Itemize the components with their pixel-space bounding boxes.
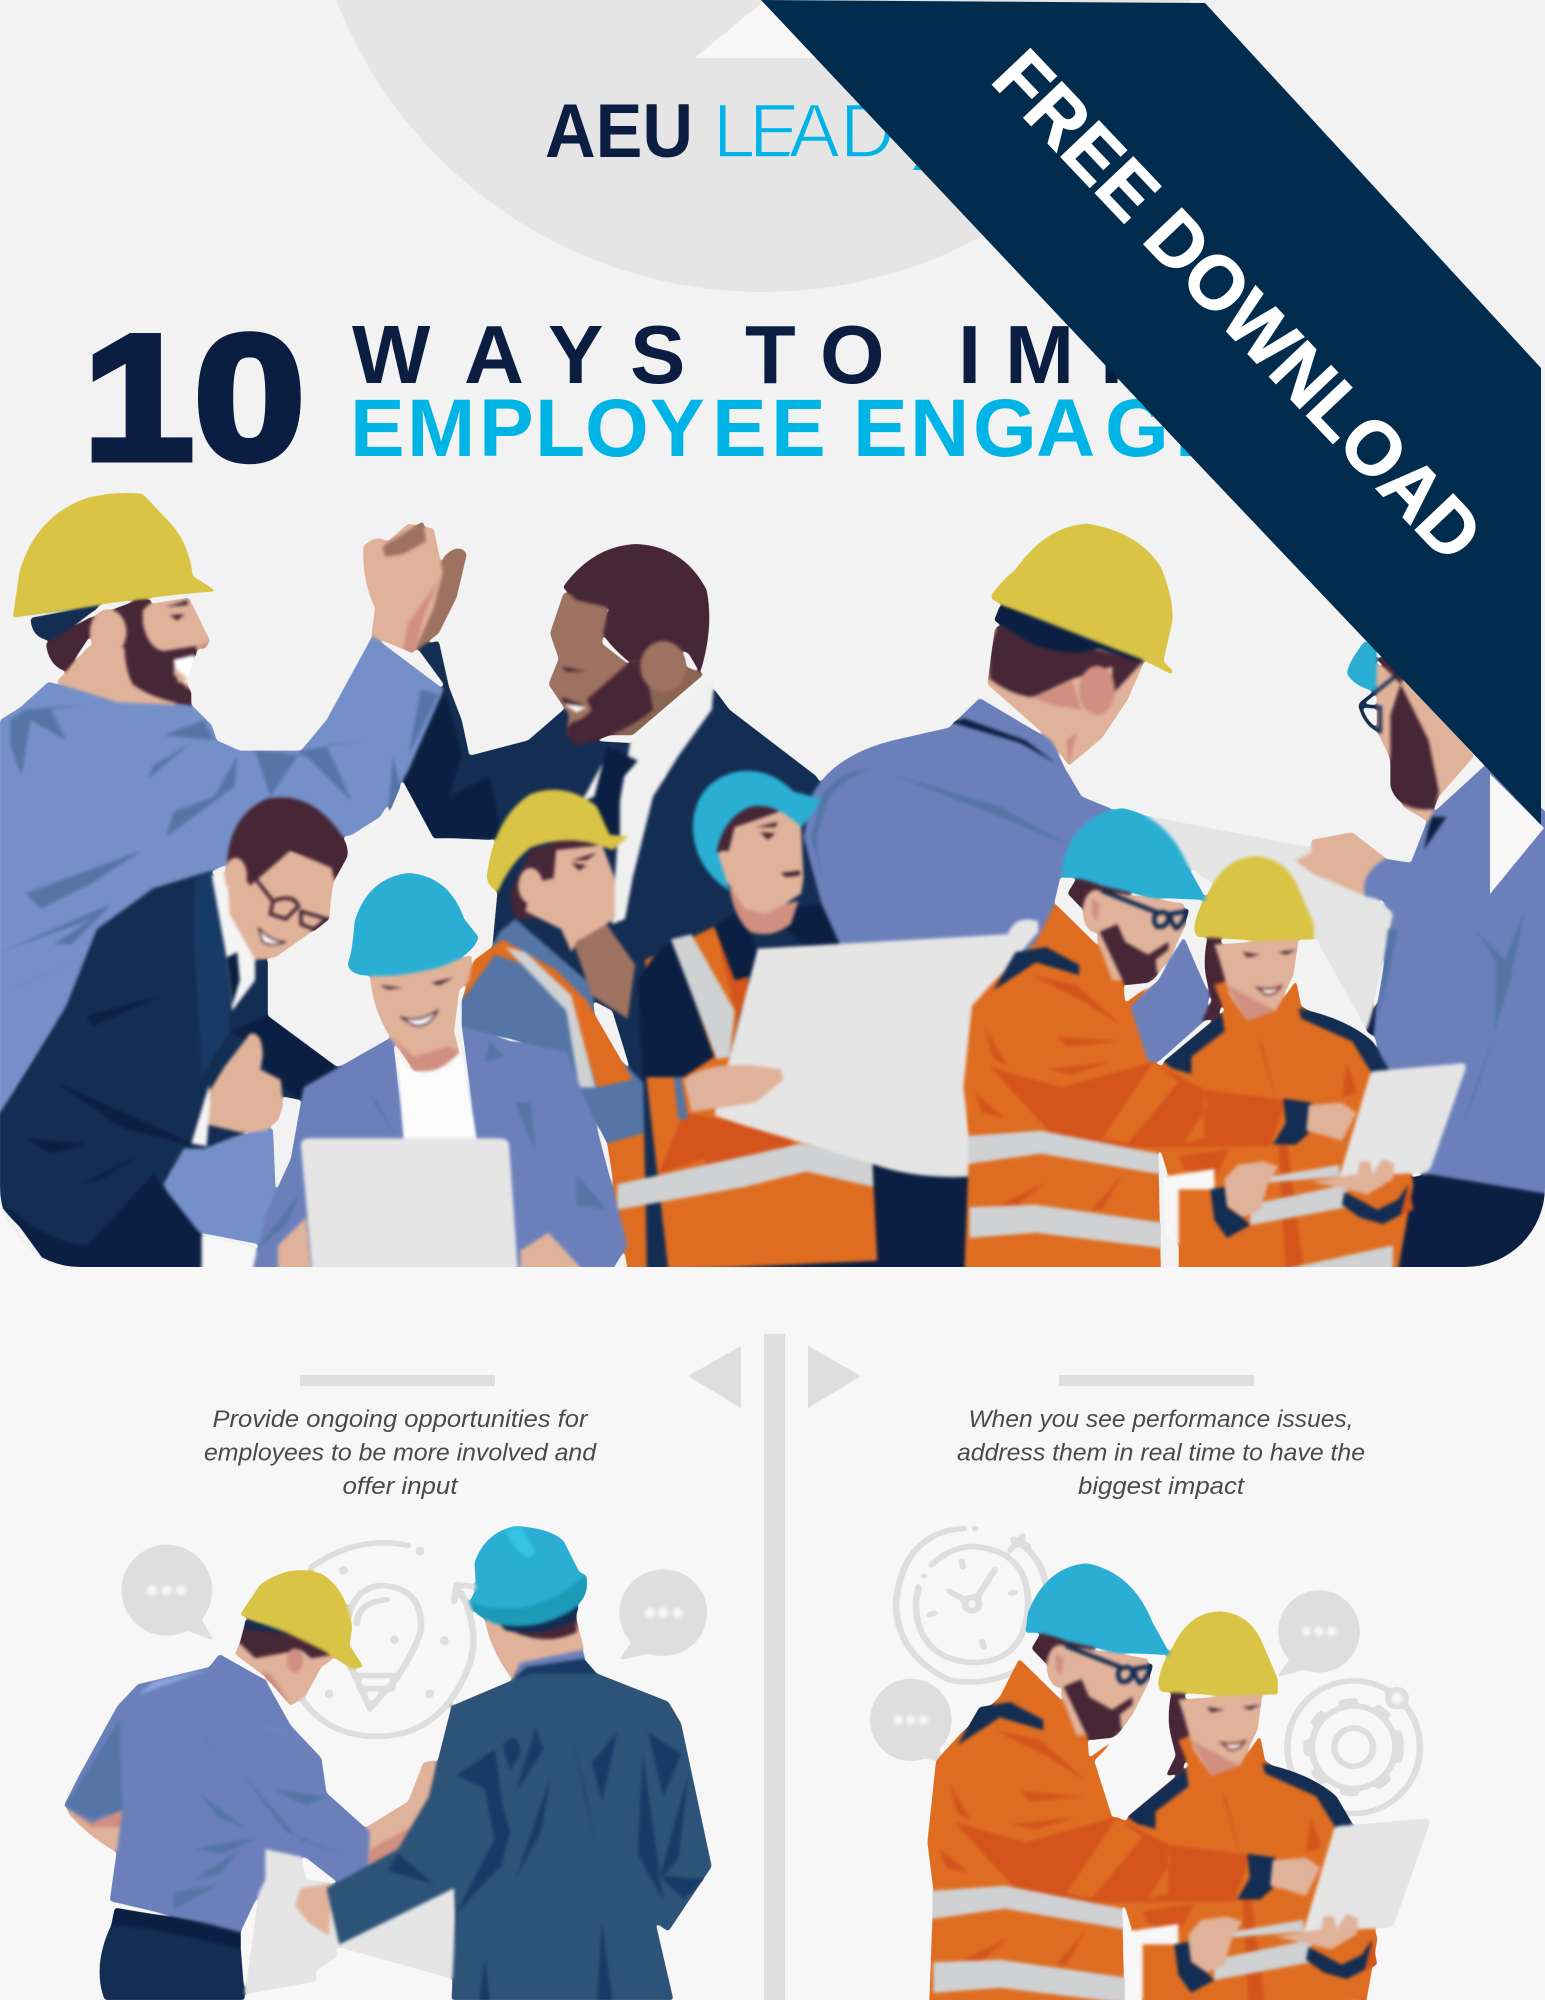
logo backdrop circle bbox=[305, 0, 1221, 292]
softened figures layer bbox=[0, 493, 1545, 1270]
icon: clock with arrow bbox=[896, 1528, 1046, 1682]
figure: bearded man in orange jacket bbox=[963, 808, 1356, 1270]
left column heading bar bbox=[300, 1375, 495, 1386]
centre divider bbox=[764, 1334, 785, 2000]
right scene artwork bbox=[870, 1528, 1420, 1814]
logo: AEU Leads: AEU bbox=[545, 89, 693, 174]
trousers and hand over sheet bbox=[674, 1065, 969, 1270]
ribbon: free download: FREE DOWNLOAD bbox=[977, 34, 1498, 577]
left scene artwork bbox=[64, 1526, 712, 2000]
ribbon: free download bbox=[761, 0, 1541, 825]
logo: AEU Leads: LEAD bbox=[713, 89, 895, 174]
figure: woman in orange jacket bbox=[1161, 856, 1466, 1270]
icon: speech bubble left bbox=[870, 1679, 952, 1765]
figure: bearded man at far right bbox=[1295, 641, 1545, 1270]
title bbox=[83, 298, 1490, 497]
figure: yellow hard hat man high-five bbox=[0, 493, 444, 1270]
icon: speech bubble upper right bbox=[1276, 1590, 1360, 1678]
orange jacket pair reused for lower panel bbox=[963, 808, 1466, 1270]
left scene bbox=[64, 1526, 712, 2000]
left caption: offer input bbox=[342, 1473, 459, 1500]
figure: blue hat man with vest bbox=[617, 771, 880, 1270]
icon: speech bubble left bbox=[121, 1545, 214, 1641]
hero illustration: workplace team bbox=[0, 493, 1545, 1270]
icon: gear bbox=[1287, 1681, 1420, 1814]
paper held by men bbox=[245, 1830, 454, 1994]
icon: light bulb with cycle arrow bbox=[301, 1543, 474, 1736]
logo: AEU Leads bbox=[545, 89, 932, 174]
figure: man in blue shirt, yellow hat bbox=[64, 1570, 436, 2000]
figure: man in navy blazer, blue hat bbox=[295, 1526, 712, 2000]
right caption: biggest impact bbox=[1078, 1473, 1245, 1500]
hero background panel bbox=[0, 0, 1545, 1267]
notch triangle under ribbon bbox=[1490, 774, 1544, 894]
figure: man with yellow hard hat, back view bbox=[804, 524, 1393, 1062]
right column heading bar bbox=[1059, 1375, 1254, 1386]
figure: blue hat man at laptop bbox=[253, 873, 628, 1270]
right arrow bbox=[808, 1346, 861, 1408]
left caption: employees to be more involved and bbox=[204, 1440, 597, 1466]
left arrow bbox=[688, 1346, 741, 1408]
title: WAYS TO IMPROVE bbox=[352, 308, 1485, 401]
icon: speech bubble right bbox=[618, 1569, 707, 1660]
figure: man in dark suit with glasses, thumbs up bbox=[0, 797, 348, 1270]
right caption: address them in real time to have the bbox=[957, 1440, 1365, 1466]
title: 10 bbox=[83, 298, 305, 497]
figure: yellow hat man in orange safety vest bbox=[462, 790, 689, 1270]
blueprint sheet bbox=[714, 919, 1038, 1177]
title: EMPLOYEE ENGAGEMENT bbox=[350, 383, 1490, 474]
right scene icons bbox=[870, 1528, 1420, 1814]
left caption: Provide ongoing opportunities for bbox=[212, 1406, 589, 1433]
right caption: When you see performance issues, bbox=[968, 1406, 1354, 1433]
figures: orange jacket pair bbox=[927, 1563, 1430, 2000]
front group figures bbox=[0, 493, 880, 1270]
figure: man in navy suit high-fiving bbox=[400, 544, 840, 1082]
notch triangle bbox=[695, 0, 835, 58]
